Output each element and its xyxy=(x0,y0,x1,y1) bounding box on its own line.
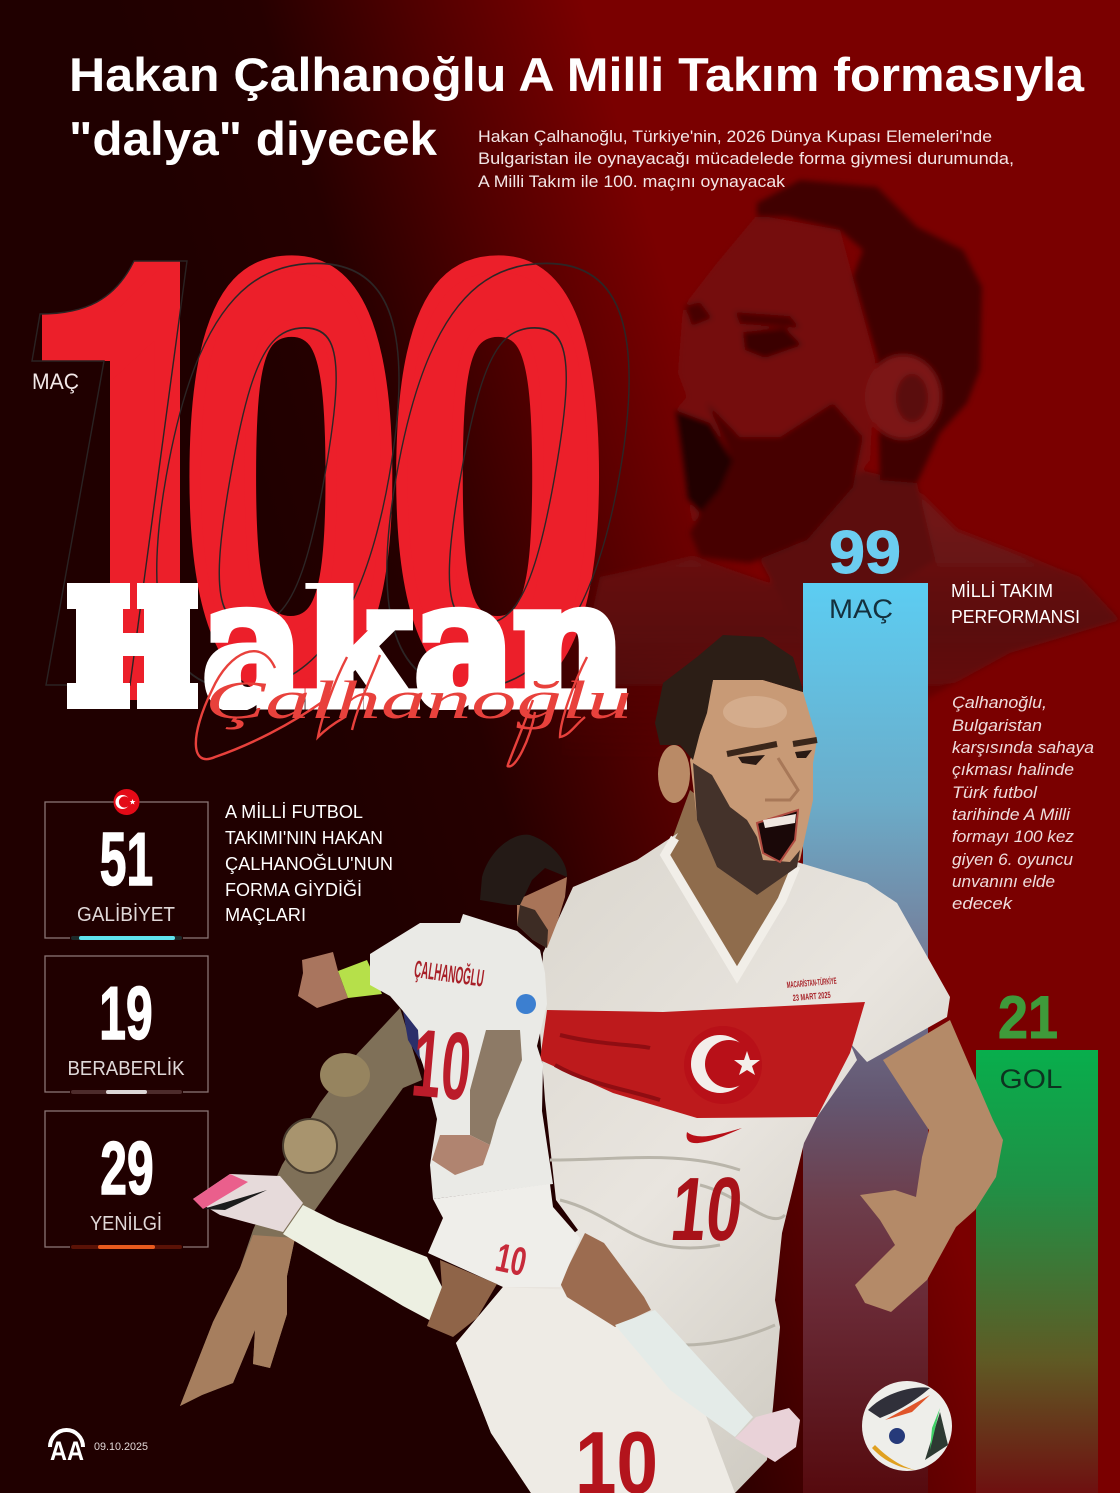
bar: 99 matches xyxy=(803,519,928,1493)
forehead highlight xyxy=(723,696,787,728)
background portrait: shouting player xyxy=(560,180,1120,760)
head xyxy=(517,877,567,948)
forearm and hand xyxy=(470,1030,522,1145)
euro badge xyxy=(516,994,536,1014)
big number 100: 1 xyxy=(60,141,284,812)
shorts xyxy=(456,1287,735,1493)
small player kicking xyxy=(180,835,800,1462)
front boot xyxy=(193,1174,303,1232)
italic description: çıkması halinde xyxy=(952,760,1074,779)
subtitle: A Milli Takım ile 100. maçını oynayacak xyxy=(478,173,786,191)
date: 09.10.2025 xyxy=(94,1441,148,1453)
jersey xyxy=(370,914,553,1199)
stats heading: ÇALHANOĞLU'NUN xyxy=(225,853,393,874)
italic description: Çalhanoğlu, xyxy=(952,693,1047,712)
extended leg xyxy=(283,1205,442,1322)
stats heading: TAKIMI'NIN HAKAN xyxy=(225,828,383,848)
shirt commemorative print xyxy=(786,976,837,1003)
portrait mouth xyxy=(675,410,733,513)
italic description: Bulgaristan xyxy=(952,716,1042,735)
portrait hair xyxy=(757,180,982,483)
portrait shirt xyxy=(560,490,1120,760)
stats heading: MAÇLARI xyxy=(225,905,306,925)
name: Hakan xyxy=(67,583,627,710)
subtitle: Hakan Çalhanoğlu, Türkiye'nin, 2026 Dünya Kupası Elemeleri'nde xyxy=(478,128,992,146)
blue sleeve strip xyxy=(403,1011,420,1060)
swoosh xyxy=(687,1128,742,1143)
logo: AA: AA xyxy=(50,1436,84,1466)
raised arm and fist xyxy=(298,952,348,1008)
ghost outline of 1 xyxy=(32,261,187,685)
subtitle: Bulgaristan ile oynayacağı mücadelede forma giymesi durumunda, xyxy=(478,150,1014,168)
stat box: draws xyxy=(45,956,208,1096)
portrait beard xyxy=(690,403,863,563)
big number 100 xyxy=(31,255,630,700)
right arm and hand xyxy=(855,1020,1003,1312)
shirt commemorative print: 23 MART 2025 xyxy=(792,990,831,1003)
icon: football xyxy=(862,1381,952,1471)
tattoo clock xyxy=(283,1119,337,1173)
italic description: unvanını elde xyxy=(952,872,1055,891)
big player celebrating: MACARİSTAN-TÜRKİYE xyxy=(786,976,837,990)
stat box: losses: YENİLGİ xyxy=(90,1212,162,1235)
small player kicking: 10 xyxy=(492,1236,530,1285)
stat box: wins xyxy=(45,802,208,942)
ear xyxy=(658,745,690,803)
performance heading: PERFORMANSI xyxy=(951,607,1080,627)
stat box: draws: BERABERLİK xyxy=(68,1057,185,1080)
big number 100: 00 xyxy=(179,141,610,812)
name: Hakan: akan xyxy=(203,542,626,745)
icon: Turkish flag xyxy=(114,789,140,815)
stat box: wins: 51 xyxy=(100,818,153,902)
bar: 21 goals: 21 xyxy=(998,984,1058,1051)
stat box: draws: 19 xyxy=(99,972,153,1056)
subtitle xyxy=(478,128,1014,191)
nose shade xyxy=(765,758,798,800)
italic description: edecek xyxy=(952,894,1014,913)
italic description: tarihinde A Milli xyxy=(952,805,1071,824)
bar: 99 matches: MAÇ xyxy=(829,594,893,624)
name: Çalhanoğlu script xyxy=(196,651,632,766)
small player kicking: ÇALHANOĞLU xyxy=(413,955,486,993)
italic description xyxy=(952,693,1094,913)
performance heading xyxy=(951,581,1080,627)
eyes and brows xyxy=(727,740,817,754)
title: "dalya" diyecek xyxy=(69,112,438,165)
label: maç: MAÇ xyxy=(32,369,79,394)
stat box: wins: GALİBİYET xyxy=(77,903,175,926)
tattooed arm and hand xyxy=(180,1008,422,1406)
title: Hakan Çalhanoğlu A Milli Takım formasıyla xyxy=(69,48,1085,101)
shorts xyxy=(428,1184,580,1287)
performance heading: MİLLİ TAKIM xyxy=(951,581,1053,601)
shirt torso xyxy=(456,833,950,1493)
bar: 21 goals: GOL xyxy=(1000,1064,1062,1094)
jersey number: 10 xyxy=(408,1009,475,1121)
mouth xyxy=(757,810,798,862)
stat box: losses: 29 xyxy=(100,1127,154,1211)
hair xyxy=(655,635,803,760)
italic description: formayı 100 kez xyxy=(952,827,1074,846)
big player celebrating xyxy=(456,635,1003,1493)
portrait neck xyxy=(760,470,935,640)
title xyxy=(69,48,1085,165)
name: Çalhanoğlu script: Çalhanoğlu xyxy=(205,670,632,730)
italic description: karşısında sahaya xyxy=(952,738,1094,757)
shirt number: 10 xyxy=(667,1159,747,1260)
rear leg xyxy=(560,1233,651,1327)
rear boot xyxy=(735,1408,800,1462)
stats heading xyxy=(225,802,393,925)
face xyxy=(690,680,817,895)
neck xyxy=(667,790,790,968)
italic description: giyen 6. oyuncu xyxy=(952,850,1074,869)
stat box: losses xyxy=(45,1111,208,1251)
beard xyxy=(693,763,800,895)
stats heading: FORMA GİYDİĞİ xyxy=(225,879,362,900)
ghost outline of 00: 00 xyxy=(89,140,698,811)
bar: 21 goals xyxy=(976,984,1098,1493)
tattoo rose xyxy=(320,1053,370,1097)
red chest band xyxy=(540,1002,865,1118)
collar xyxy=(665,838,796,975)
bar: 99 matches: 99 xyxy=(829,519,901,586)
crescent and star xyxy=(684,1026,762,1104)
portrait ear xyxy=(865,355,941,439)
portrait face xyxy=(673,215,875,557)
portrait eye xyxy=(743,328,802,358)
italic description: Türk futbol xyxy=(952,783,1038,802)
name: Hakan: H xyxy=(68,544,201,747)
stats heading: A MİLLİ FUTBOL xyxy=(225,802,363,822)
